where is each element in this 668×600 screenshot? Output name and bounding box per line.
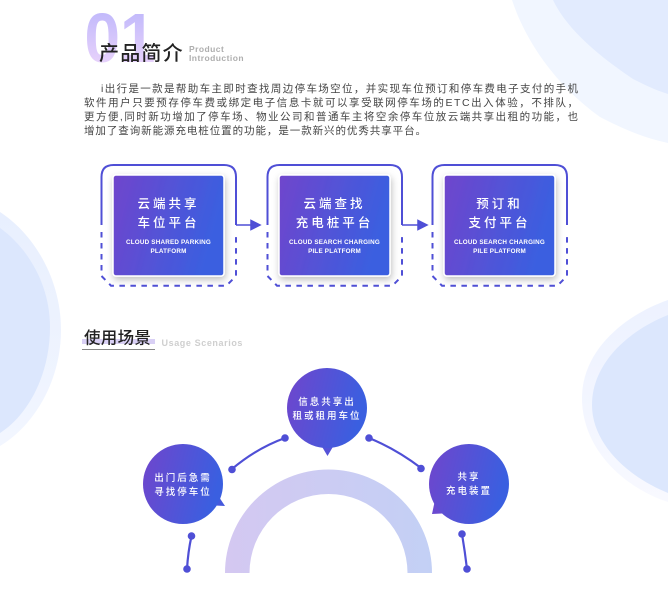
panel: booking and payment: CLOUD SEARCH CHARGING xyxy=(454,239,545,246)
bubble: left: 出门后急需 xyxy=(154,472,212,484)
panel: booking and payment xyxy=(432,165,567,286)
connector: left to top xyxy=(228,434,289,473)
background blob: top right xyxy=(512,0,668,143)
panel: cloud search charging: 云端查找 xyxy=(303,197,366,211)
english heading: Product Introduction xyxy=(189,44,244,63)
intro paragraph: 增加了查询新能源充电桩位置的功能，是一款新兴的优秀共享平台。 xyxy=(84,124,426,137)
heading: usage scenarios xyxy=(82,328,243,350)
panel: cloud shared parking: PLATFORM xyxy=(150,248,187,255)
english heading: Product Introduction: Introduction xyxy=(189,53,244,63)
heading: usage scenarios: Usage Scenarios xyxy=(162,338,243,348)
arrow: second to third xyxy=(402,220,427,230)
bubble: top: 信息共享出 xyxy=(298,396,356,408)
panel: cloud search charging xyxy=(268,165,402,286)
panel: booking and payment: 支付平台 xyxy=(468,215,531,230)
connector: top to right xyxy=(365,434,425,472)
semicircle arch xyxy=(225,470,432,573)
bubble: right xyxy=(429,444,509,524)
heading: 产品简介: 产品简介 xyxy=(99,42,184,65)
section number 01: 01 xyxy=(84,0,156,77)
english heading: Product Introduction: Product xyxy=(189,44,224,54)
intro paragraph: 软件用户只要预存停车费或绑定电子信息卡就可以享受联网停车场的ETC出入体验，不排队， xyxy=(84,96,578,109)
connector: bottom right xyxy=(458,530,471,573)
heading: usage scenarios: 使用场景 xyxy=(84,328,151,348)
intro paragraph: i出行是一款是帮助车主即时查找周边停车场空位，并实现车位预订和停车费电子支付的手机 xyxy=(101,82,578,95)
bubble: top: 租或租用车位 xyxy=(292,410,362,422)
panel: cloud shared parking: 云端共享 xyxy=(137,196,200,211)
connector: bottom left xyxy=(183,532,195,573)
bubble: left: 寻找停车位 xyxy=(154,486,212,498)
panel: cloud search charging: 充电桩平台 xyxy=(296,215,373,230)
panel: cloud search charging: PILE PLATFORM xyxy=(308,248,361,255)
panel: cloud search charging: CLOUD SEARCH CHARGING xyxy=(289,239,380,246)
panel: cloud shared parking xyxy=(102,165,236,286)
arrow: first to second xyxy=(236,220,260,230)
background blob: left xyxy=(0,212,61,446)
intro paragraph xyxy=(84,82,578,137)
bubble: right: 共享 xyxy=(457,471,481,483)
panel: cloud shared parking: 车位平台 xyxy=(137,215,200,230)
background blob: right xyxy=(582,300,668,502)
bubble: left xyxy=(143,444,225,524)
panel: cloud shared parking: CLOUD SHARED PARKING xyxy=(126,239,211,246)
panel: booking and payment: 预订和 xyxy=(476,197,523,211)
bubble: top xyxy=(287,368,367,456)
intro paragraph: 更方便,同时新功增加了停车场、物业公司和普通车主将空余停车位放云端共享出租的功能，也 xyxy=(84,110,578,123)
panel: booking and payment: PILE PLATFORM xyxy=(473,248,526,255)
bubble: right: 充电装置 xyxy=(446,485,492,497)
